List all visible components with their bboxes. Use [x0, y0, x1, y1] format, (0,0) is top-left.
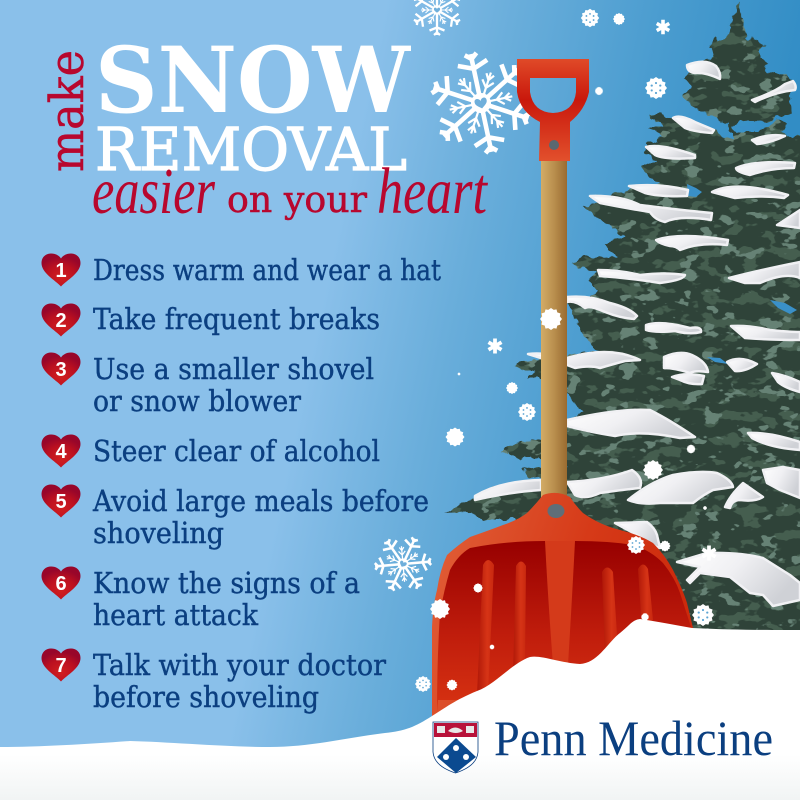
- large snowflake: [418, 43, 544, 163]
- tip 2: Take frequent breaks: [93, 302, 380, 336]
- tip 1: Dress warm and wear a hat: [93, 253, 441, 287]
- title word: easier: easier: [92, 155, 215, 228]
- tips list: [42, 253, 441, 714]
- title word: REMOVAL: REMOVAL: [95, 115, 407, 184]
- tip 5: shoveling: [93, 516, 224, 550]
- tip 7: [42, 648, 386, 714]
- tip 5: Avoid large meals before: [92, 484, 429, 518]
- title words: on your: on your: [227, 180, 368, 221]
- tip 6: [42, 566, 360, 632]
- tree silhouette: [443, 0, 800, 650]
- title word: heart: heart: [377, 155, 488, 228]
- tip 5: 5: [55, 491, 67, 513]
- lower snowflake: [364, 526, 442, 602]
- Penn shield: [433, 722, 478, 773]
- tip 7: 7: [55, 655, 67, 677]
- sky gaps between boughs: [687, 126, 797, 364]
- shovel blade: [432, 493, 693, 720]
- shovel: [432, 59, 693, 720]
- Penn Medicine wordmark: Penn Medicine: [494, 710, 773, 766]
- title word: make: make: [40, 50, 95, 172]
- tip 1: 1: [55, 260, 67, 282]
- tip 7: before shoveling: [93, 680, 319, 714]
- title: [40, 28, 488, 228]
- tip 5: [42, 484, 429, 550]
- tip 3: 3: [55, 359, 67, 381]
- snow bank: [0, 619, 800, 800]
- blade scoop: [437, 541, 691, 713]
- Penn Medicine logo: [433, 710, 773, 773]
- tip 2: 2: [55, 310, 67, 332]
- tip 3: Use a smaller shovel: [93, 352, 374, 386]
- tip 6: 6: [55, 573, 67, 595]
- tip 6: Know the signs of a: [93, 566, 360, 600]
- tip 4: Steer clear of alcohol: [93, 434, 380, 468]
- shovel shaft: [541, 160, 567, 505]
- pine tree with snow: [443, 0, 800, 650]
- handle bolt: [549, 140, 559, 150]
- title word: SNOW: SNOW: [95, 28, 412, 134]
- tip 6: heart attack: [93, 598, 258, 632]
- tip 7: Talk with your doctor: [93, 648, 386, 682]
- falling snowflakes: [415, 9, 716, 692]
- snow on boughs: [475, 62, 800, 606]
- top snowflake: [410, 0, 464, 35]
- tip 4: 4: [55, 441, 67, 463]
- shovel handle: [517, 59, 589, 161]
- tip 3: or snow blower: [93, 384, 301, 418]
- blade ribs: [477, 541, 653, 695]
- tip 3: [42, 352, 374, 418]
- blade bolt: [548, 504, 564, 518]
